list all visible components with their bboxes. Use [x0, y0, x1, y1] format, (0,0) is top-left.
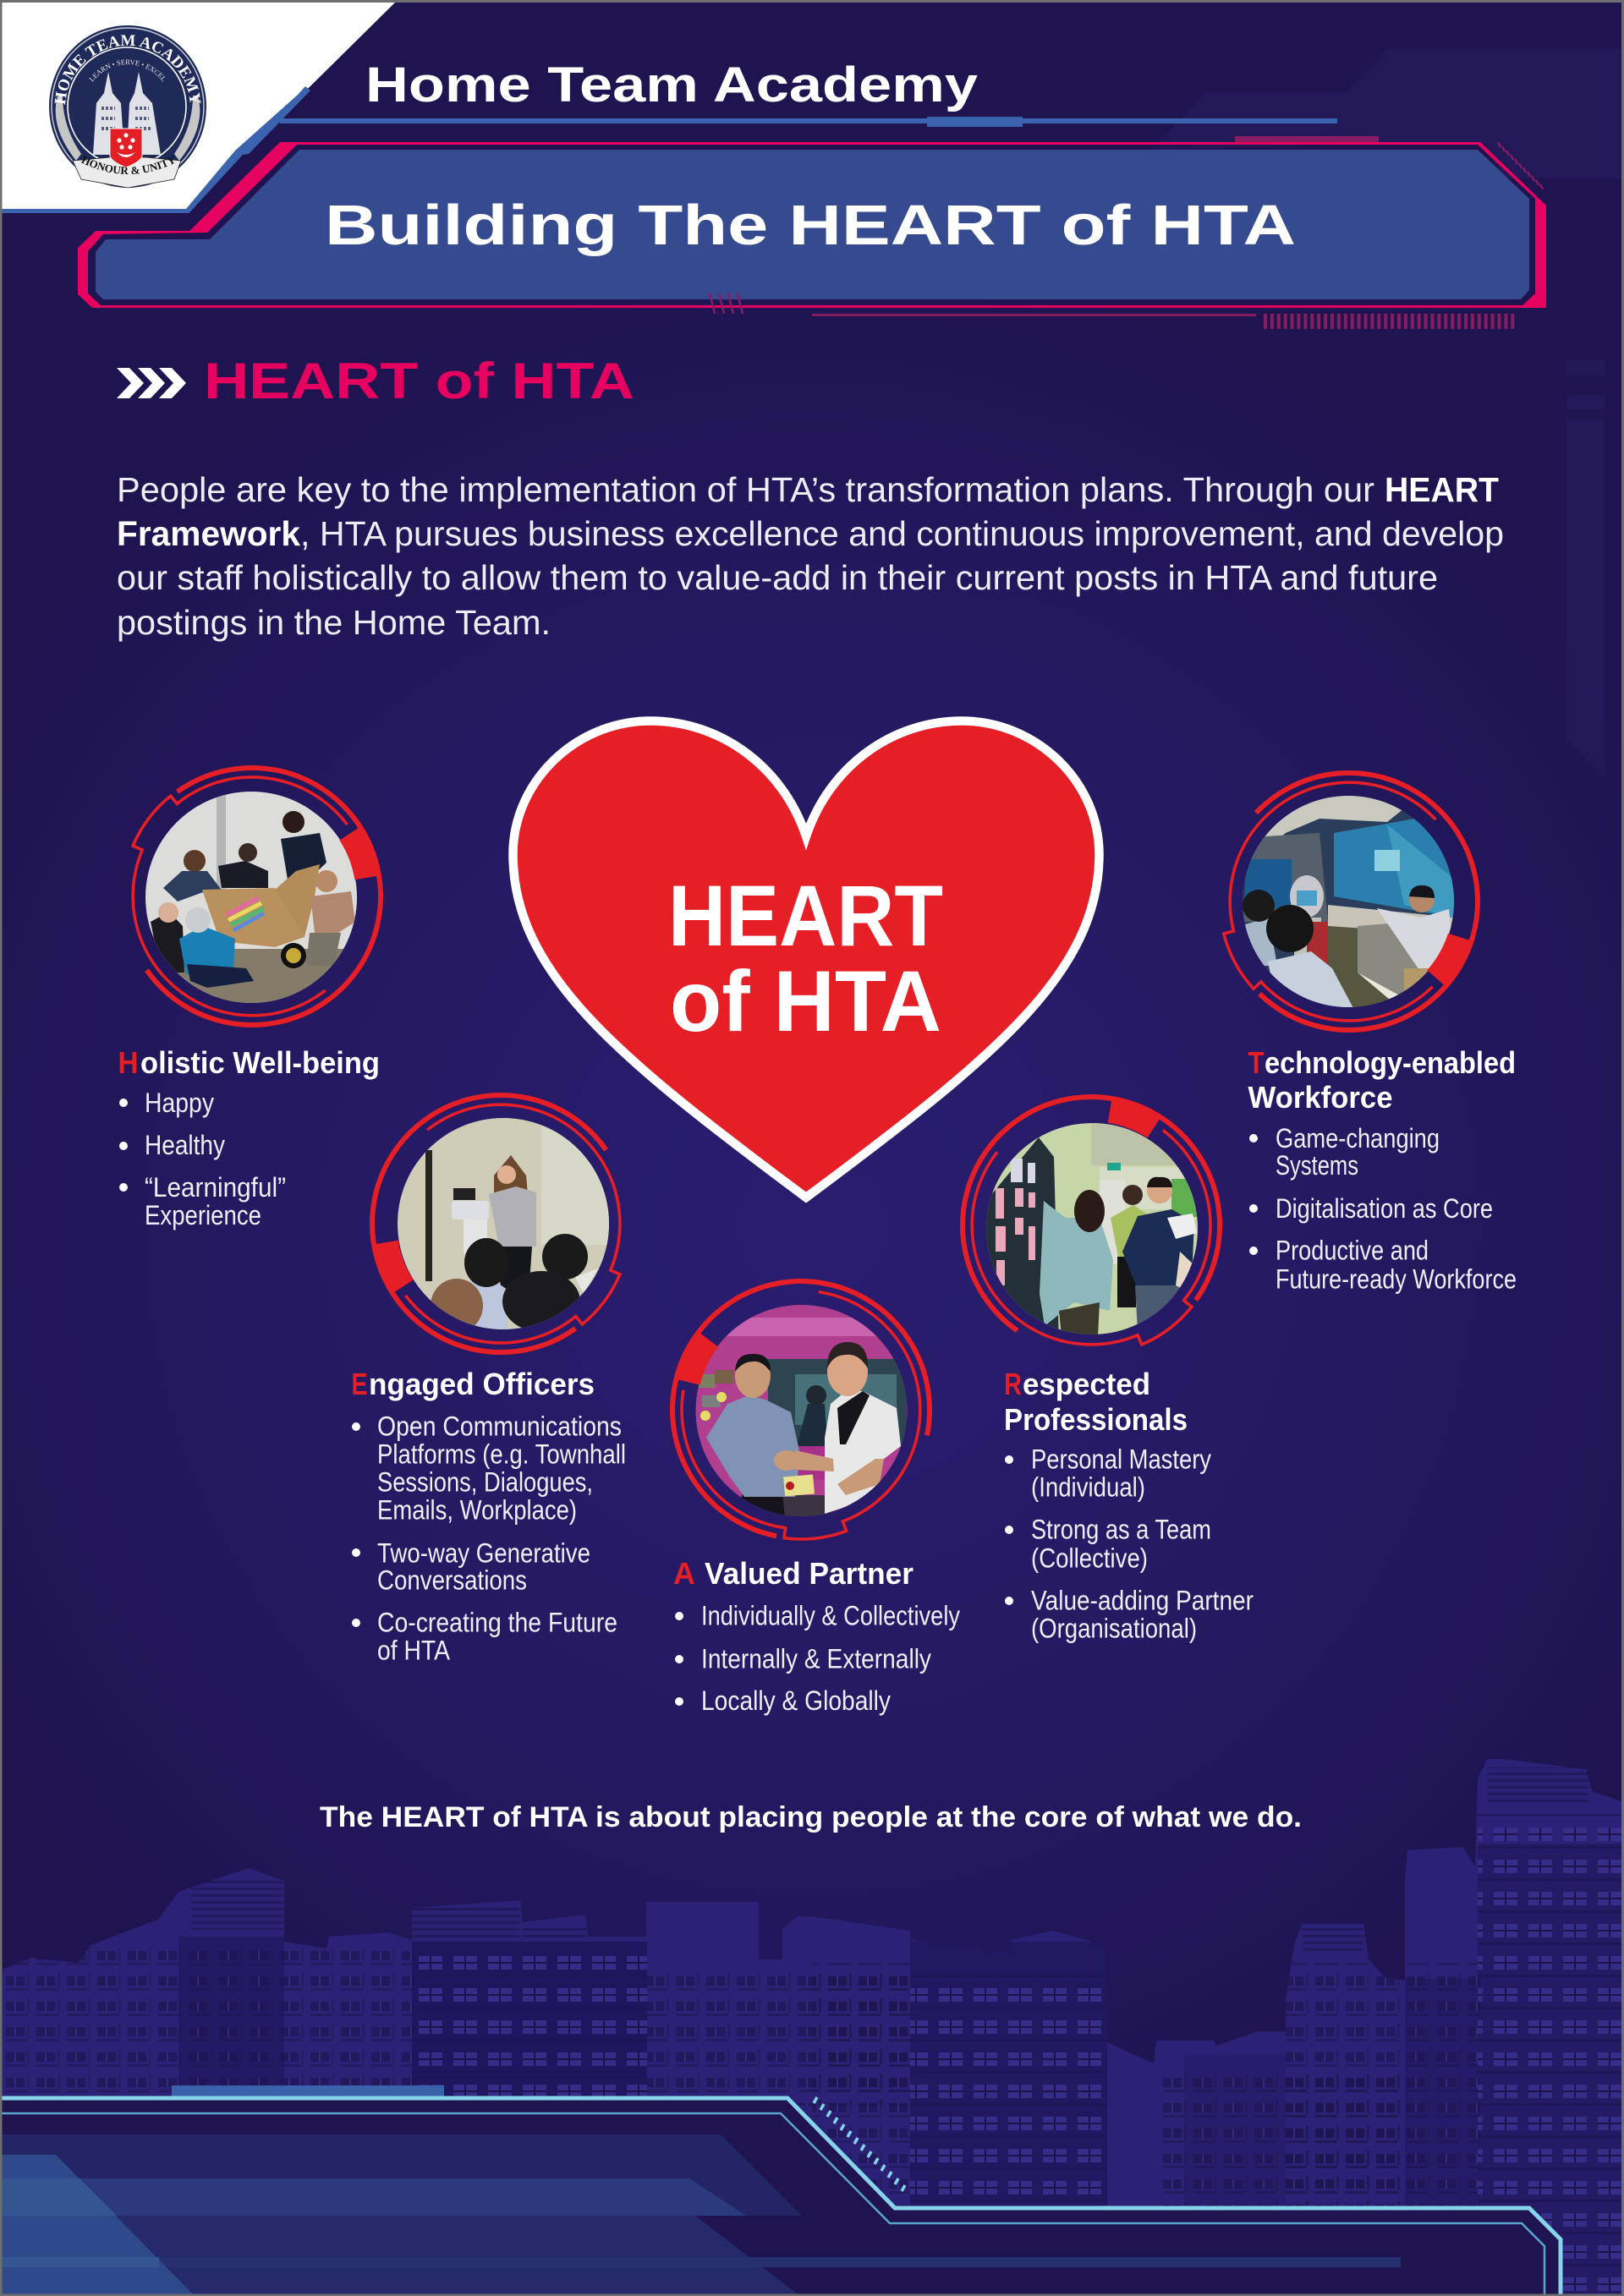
logo: Home Team Academy crest: LEARN • SERVE • EXCEL [89, 59, 166, 82]
closing statement: The HEART of HTA is about placing people at the core of what we do. [320, 1801, 1302, 1833]
footer accent lines [0, 2085, 1561, 2296]
circle: Technology-enabled Workforce photo and ring [1221, 770, 1480, 1033]
skyline [0, 1759, 1624, 2296]
section heading: HEART of HTA [117, 353, 634, 409]
logo: Home Team Academy crest [49, 25, 206, 188]
text block: Respected Professionals: Strong as a Team [1031, 1514, 1211, 1544]
title banner [78, 136, 1546, 329]
circle: Respected Professionals photo and ring [960, 1094, 1223, 1346]
text block: Respected Professionals: Personal Mastery [1031, 1444, 1211, 1475]
intro paragraph: People are key to the implementation of HTA’s transformation plans. Through our [117, 470, 1374, 509]
text block: Technology-enabled Workforce: Systems [1276, 1150, 1358, 1181]
text block: Technology-enabled Workforce: Future-ready Workforce [1276, 1263, 1517, 1294]
section title: HEART of HTA [204, 353, 634, 409]
text block: Technology-enabled Workforce: T [1248, 1045, 1264, 1080]
intro paragraph: postings in the Home Team. [117, 603, 551, 642]
text block: Engaged Officers: Platforms (e.g. Townhall [377, 1439, 626, 1470]
text block: Holistic Well-being: “Learningful” [145, 1172, 286, 1203]
text block: Holistic Well-being: Happy [145, 1088, 214, 1118]
text block: Holistic Well-being: H [118, 1045, 139, 1080]
header rule [280, 117, 1337, 127]
text block: Holistic Well-being [118, 1045, 380, 1230]
text block: Technology-enabled Workforce: Productive and [1276, 1235, 1429, 1265]
logo: Home Team Academy crest: HOME TEAM ACADEMY [54, 36, 201, 105]
text block: Engaged Officers: Conversations [377, 1564, 527, 1595]
heart [513, 721, 1100, 1197]
text block: Engaged Officers: of HTA [377, 1636, 451, 1666]
text block: Technology-enabled Workforce [1248, 1045, 1517, 1294]
text block: A Valued Partner: Internally & Externally [701, 1644, 931, 1674]
title: Building The HEART of HTA [325, 194, 1296, 257]
white logo corner [0, 3, 395, 213]
text block: Technology-enabled Workforce: Digitalisation as Core [1276, 1193, 1493, 1224]
intro paragraph: Framework [117, 514, 300, 553]
circle: A Valued Partner photo and ring [670, 1279, 932, 1541]
text block: Technology-enabled Workforce: Game-changing [1276, 1123, 1440, 1153]
text block: Engaged Officers: ngaged Officers [369, 1367, 595, 1401]
text block: Respected Professionals [1004, 1367, 1254, 1644]
text block: Engaged Officers: Co-creating the Future [377, 1607, 617, 1637]
text block: Respected Professionals: Professionals [1004, 1402, 1188, 1437]
intro paragraph: our staff holistically to allow them to value-add in their current posts in HTA and future [117, 558, 1438, 597]
text block: Engaged Officers: Sessions, Dialogues, [377, 1466, 593, 1497]
text block: A Valued Partner: A [673, 1556, 695, 1591]
text block: Holistic Well-being: Experience [145, 1200, 261, 1230]
heart: of HTA [670, 953, 941, 1049]
text block: Holistic Well-being: Healthy [145, 1130, 225, 1160]
text block: A Valued Partner [673, 1556, 960, 1716]
text block: Respected Professionals: (Collective) [1031, 1543, 1148, 1573]
text block: Respected Professionals: Value-adding Partner [1031, 1585, 1254, 1615]
icon: chevrons [117, 368, 186, 398]
text block: Engaged Officers: E [352, 1367, 367, 1401]
logo: Home Team Academy crest: HONOUR & UNITY [81, 156, 174, 174]
intro paragraph: HEART [1385, 470, 1499, 509]
heart: HEART [668, 868, 943, 964]
text block: Holistic Well-being: olistic Well-being [140, 1045, 380, 1080]
circle: Engaged Officers photo and ring [370, 1093, 623, 1355]
footer panel [0, 2098, 1561, 2296]
circle: Holistic Well-being photo and ring [130, 765, 383, 1027]
text block: Respected Professionals: (Individual) [1031, 1471, 1145, 1502]
text block: Engaged Officers [352, 1367, 626, 1666]
text block: Engaged Officers: Two-way Generative [377, 1537, 590, 1568]
text block: Technology-enabled Workforce: Workforce [1248, 1080, 1392, 1115]
text block: Technology-enabled Workforce: echnology-enabled [1265, 1045, 1516, 1080]
text block: Respected Professionals: R [1004, 1367, 1022, 1401]
text block: A Valued Partner: Valued Partner [705, 1556, 914, 1591]
text block: Respected Professionals: (Organisational) [1031, 1614, 1197, 1644]
background decoration: top right shapes [1151, 48, 1624, 777]
text block: A Valued Partner: Locally & Globally [701, 1685, 891, 1716]
text block: Engaged Officers: Emails, Workplace) [377, 1495, 577, 1526]
text block: Engaged Officers: Open Communications [377, 1411, 622, 1441]
intro paragraph: , HTA pursues business excellence and continuous improvement, and develop [300, 514, 1504, 553]
text block: Respected Professionals: espected [1023, 1367, 1150, 1401]
intro paragraph [117, 470, 1504, 642]
header name: Home Team Academy: Home Team Academy [365, 58, 978, 112]
text block: A Valued Partner: Individually & Collectively [701, 1600, 960, 1630]
